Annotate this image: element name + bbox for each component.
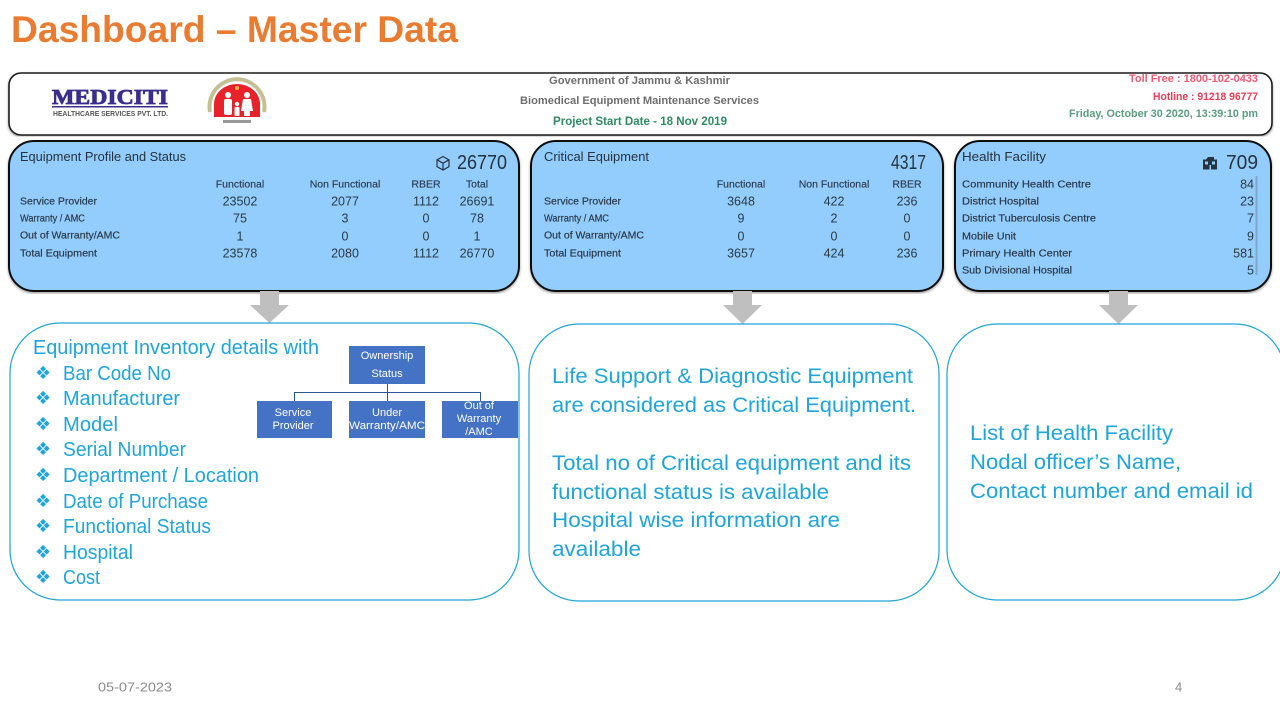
bullet list: Manufacturer <box>63 388 180 410</box>
table: equipment status: Total Equipment <box>20 248 97 260</box>
arrow: equipment panel to details <box>250 291 289 323</box>
panel heading: Critical Equipment <box>544 149 649 164</box>
bullet list: ❖ <box>35 567 51 588</box>
table: equipment status: 75 <box>233 212 247 226</box>
list: facility counts <box>962 178 1254 278</box>
panel: health facility <box>955 141 1271 291</box>
org chart: ownership status: Service <box>275 407 311 419</box>
bullet list: Model <box>63 414 118 436</box>
table: equipment status: Non Functional <box>310 178 380 190</box>
table: critical equipment: Out of Warranty/AMC <box>544 230 644 242</box>
list: facility counts: District Hospital <box>962 196 1039 208</box>
text block: definition <box>552 364 916 417</box>
table: equipment status: Total <box>466 178 488 190</box>
org chart: ownership status: /AMC <box>465 426 493 438</box>
panel: critical equipment notes <box>529 324 939 601</box>
text block: availability: available <box>552 537 641 561</box>
arrow: critical panel to details <box>723 291 762 324</box>
list: facility counts: Primary Health Center <box>962 248 1073 260</box>
table: equipment status: 0 <box>342 230 349 244</box>
text block: definition: Life Support & Diagnostic Equipment <box>552 364 913 388</box>
text block: definition: are considered as Critical Equipment. <box>552 393 916 417</box>
table: critical equipment: 236 <box>897 194 917 208</box>
table: critical equipment: RBER <box>892 178 922 190</box>
table: equipment status: Warranty / AMC <box>20 212 85 224</box>
text block: facility information: Contact number and email id <box>970 479 1253 503</box>
bullet list: ❖ <box>35 439 51 460</box>
text block: availability: Total no of Critical equipment and its <box>552 451 911 475</box>
org chart: ownership status <box>257 346 518 438</box>
list: facility counts: Community Health Centre <box>962 178 1091 190</box>
list: facility counts: District Tuberculosis Centre <box>962 212 1096 224</box>
org chart: ownership status: Status <box>371 368 403 380</box>
logo: Mediciti: HEALTHCARE SERVICES PVT. LTD. <box>53 111 168 118</box>
table: critical equipment: 3648 <box>727 194 755 208</box>
table: equipment status <box>20 178 494 260</box>
bullet list: ❖ <box>35 516 51 537</box>
bullet list: ❖ <box>35 542 51 563</box>
bullet list <box>35 363 259 589</box>
table: equipment status: Functional <box>216 178 264 190</box>
header centre text: Project Start Date - 18 Nov 2019 <box>553 114 727 128</box>
total count: 4317 <box>891 152 926 174</box>
panel heading: Health Facility <box>962 149 1047 164</box>
table: critical equipment: 422 <box>824 194 844 208</box>
panel: header banner <box>9 73 1272 135</box>
table: equipment status: 23578 <box>223 246 257 260</box>
bullet list: Serial Number <box>63 439 186 461</box>
header centre text: Biomedical Equipment Maintenance Services <box>520 95 759 107</box>
list: facility counts: 581 <box>1233 246 1254 260</box>
text block: facility information <box>970 421 1253 503</box>
table: equipment status: 3 <box>342 212 349 226</box>
panel: equipment profile and status <box>9 141 519 291</box>
bullet list: ❖ <box>35 414 51 435</box>
table: equipment status: Out of Warranty/AMC <box>20 230 120 242</box>
table: critical equipment: 9 <box>738 212 745 226</box>
org chart: ownership status: Out of <box>464 400 495 412</box>
table: equipment status: 78 <box>470 212 484 226</box>
table: critical equipment: Functional <box>717 178 765 190</box>
list: facility counts: 9 <box>1247 230 1254 244</box>
list: facility counts: Mobile Unit <box>962 230 1016 242</box>
table: equipment status: 26770 <box>460 246 494 260</box>
table: equipment status: Service Provider <box>20 196 97 208</box>
table: critical equipment: Total Equipment <box>544 248 621 260</box>
table: equipment status: 1 <box>237 230 244 244</box>
table: equipment status: 1112 <box>413 194 439 208</box>
arrow: facility panel to details <box>1099 291 1138 324</box>
table: equipment status: 1112 <box>413 246 439 260</box>
header centre text: Government of Jammu & Kashmir <box>549 75 731 87</box>
text block: facility information: List of Health Facility <box>970 421 1173 445</box>
table: critical equipment: 0 <box>738 230 745 244</box>
bullet list: Department / Location <box>63 465 259 487</box>
table: equipment status: 1 <box>474 230 481 244</box>
table: critical equipment: 0 <box>831 230 838 244</box>
table: critical equipment: 236 <box>897 246 917 260</box>
table: critical equipment: Warranty / AMC <box>544 212 609 224</box>
org chart: ownership status: Warranty/AMC <box>349 420 425 432</box>
header centre text <box>520 75 759 128</box>
scrollbar <box>1256 176 1258 275</box>
table: critical equipment: 0 <box>904 230 911 244</box>
text block: availability: Hospital wise information are <box>552 508 840 532</box>
header contact and date: Friday, October 30 2020, 13:39:10 pm <box>1069 108 1258 120</box>
list: facility counts: 5 <box>1247 264 1254 278</box>
table: critical equipment: Service Provider <box>544 196 621 208</box>
footer date: 05-07-2023 <box>98 680 172 694</box>
bullet list: Hospital <box>63 542 133 564</box>
title: Dashboard – Master Data <box>11 9 458 50</box>
list: facility counts: 7 <box>1247 212 1254 226</box>
text block: availability <box>552 451 911 561</box>
org chart: ownership status: Ownership <box>361 350 413 362</box>
bullet list: Cost <box>63 567 100 589</box>
panel heading: Equipment Profile and Status <box>20 149 186 164</box>
intro text: Equipment Inventory details with <box>33 337 319 359</box>
org chart: ownership status: Warranty <box>457 413 502 425</box>
table: critical equipment: 0 <box>904 212 911 226</box>
bullet list: ❖ <box>35 363 51 384</box>
table: critical equipment <box>544 178 922 260</box>
bullet list: ❖ <box>35 388 51 409</box>
table: equipment status: 0 <box>423 212 430 226</box>
bullet list: ❖ <box>35 465 51 486</box>
page number: 4 <box>1175 680 1182 694</box>
panel: equipment inventory details <box>10 323 519 600</box>
header contact and date: Toll Free : 1800-102-0433 <box>1129 73 1258 85</box>
list: facility counts: 23 <box>1240 194 1254 208</box>
bullet list: Bar Code No <box>63 363 171 385</box>
icon: box <box>437 156 449 170</box>
total count: 709 <box>1226 152 1258 174</box>
table: equipment status: 2080 <box>331 246 359 260</box>
logo: Mediciti: MEDICITI <box>52 85 168 109</box>
bullet list: Functional Status <box>63 516 211 538</box>
list: facility counts: 84 <box>1240 178 1254 192</box>
org chart: ownership status: Under <box>372 407 402 419</box>
table: equipment status: 23502 <box>223 194 257 208</box>
table: equipment status: 2077 <box>331 194 359 208</box>
table: equipment status: 0 <box>423 230 430 244</box>
list: facility counts: Sub Divisional Hospital <box>962 264 1072 276</box>
logo: Mediciti <box>52 85 168 118</box>
panel: critical equipment <box>531 141 943 291</box>
logo: National Rural Health Mission <box>210 79 264 123</box>
bullet list: Date of Purchase <box>63 491 208 513</box>
header contact and date <box>1069 73 1258 120</box>
bullet list: ❖ <box>35 491 51 512</box>
table: critical equipment: Non Functional <box>799 178 869 190</box>
table: critical equipment: 3657 <box>727 246 755 260</box>
total count: 26770 <box>457 152 507 174</box>
icon: hospital building <box>1203 157 1217 170</box>
text block: facility information: Nodal officer’s Name, <box>970 450 1181 474</box>
text block: availability: functional status is available <box>552 480 829 504</box>
table: critical equipment: 424 <box>824 246 844 260</box>
table: equipment status: 26691 <box>460 194 494 208</box>
panel: health facility notes <box>947 324 1280 600</box>
table: equipment status: RBER <box>411 178 441 190</box>
header contact and date: Hotline : 91218 96777 <box>1153 91 1258 103</box>
org chart: ownership status: Provider <box>273 420 314 432</box>
table: critical equipment: 2 <box>831 212 838 226</box>
